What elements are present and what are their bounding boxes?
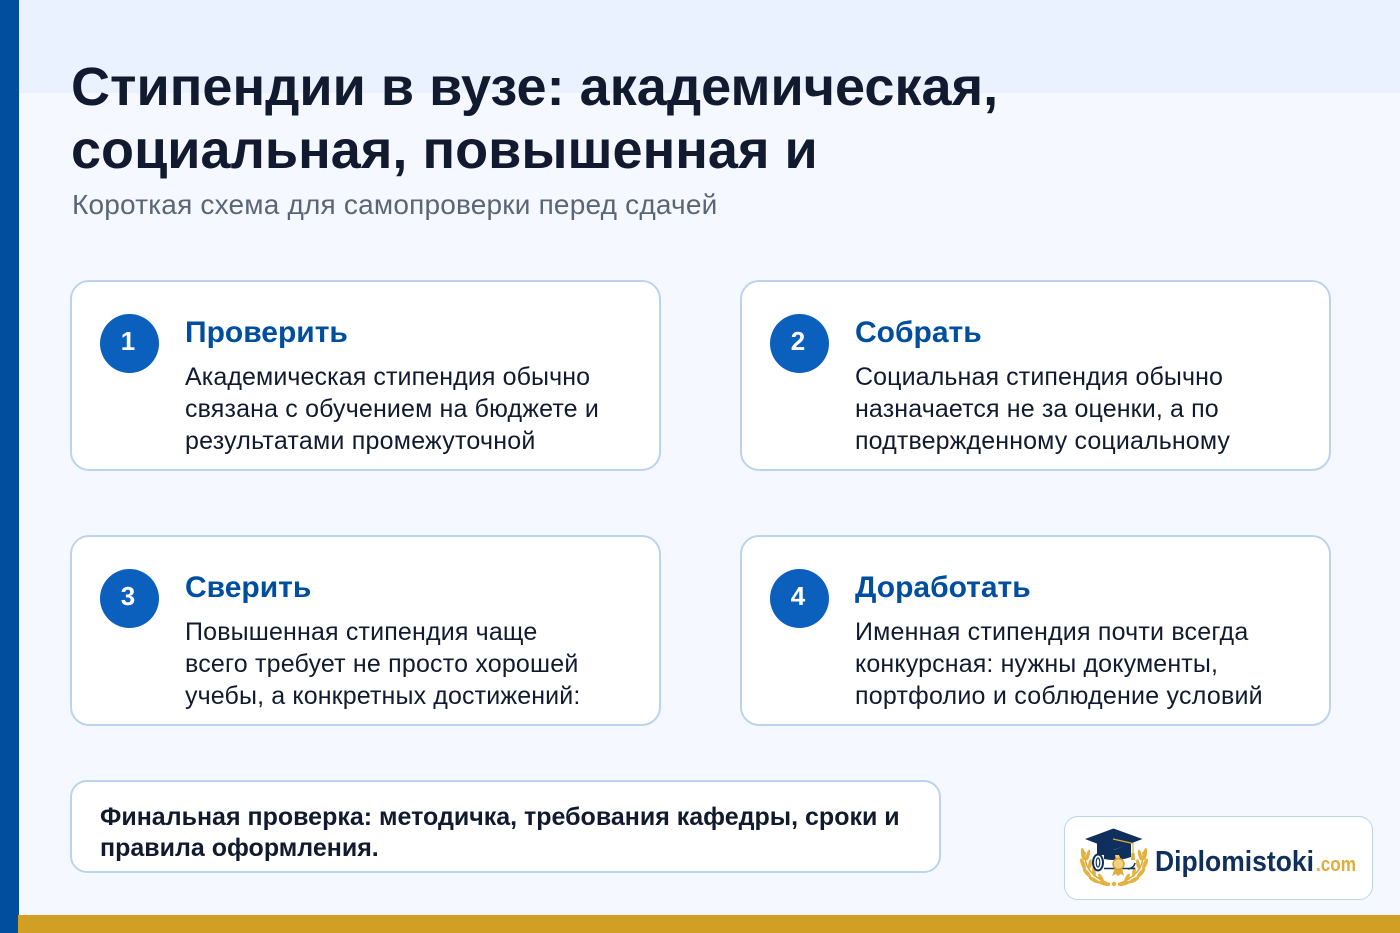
step 3 number badge [100,569,159,628]
icon: graduation cap with laurel [1079,828,1149,887]
logo wordmark: Diplomistoki [1155,846,1314,878]
step 2 text: подтвержденному социальному [855,427,1230,455]
step 2 text [855,363,1230,455]
panel: final check [70,780,941,873]
panel: final check: правила оформления. [100,834,379,862]
step 3 text: Повышенная стипендия чаще [185,618,537,646]
title: социальная, повышенная и [71,120,818,180]
step 1 heading: Проверить [185,316,348,349]
panel: step 2 [740,280,1331,471]
panel: step 4 [740,535,1331,726]
step 4 heading: Доработать [855,571,1031,604]
step 1 text: Академическая стипендия обычно [185,363,590,391]
step 1 text: результатами промежуточной [185,427,536,455]
panel: step 3 [70,535,661,726]
bottom accent bar [18,915,1400,933]
step 2 text: Социальная стипендия обычно [855,363,1223,391]
step 4 number badge: 4 [791,581,805,611]
step 1 text [185,363,599,455]
step 2 heading: Собрать [855,316,982,349]
step 4 text: портфолио и соблюдение условий [855,682,1263,710]
step 3 text: учебы, а конкретных достижений: [185,682,580,710]
step 4 text: Именная стипендия почти всегда [855,618,1248,646]
panel: final check: Финальная проверка: методичка, требования кафедры, сроки и [100,803,900,831]
logo: Diplomistoki.com [1064,816,1373,900]
step 3 text [185,618,580,710]
step 3 text: всего требует не просто хорошей [185,650,579,678]
step 2 number badge [770,314,829,373]
title: Стипендии в вузе: академическая, [71,57,998,117]
step 4 text [855,618,1263,710]
subtitle: Короткая схема для самопроверки перед сдачей [72,189,717,220]
panel: step 1 [70,280,661,471]
logo wordmark: .com [1316,854,1356,876]
step 4 text: конкурсная: нужны документы, [855,650,1218,678]
step 2 text: назначается не за оценки, а по [855,395,1219,423]
step 2 number badge: 2 [791,326,805,356]
step 1 text: связана с обучением на бюджете и [185,395,599,423]
step 1 number badge: 1 [121,326,135,356]
step 3 heading: Сверить [185,571,311,604]
step 4 number badge [770,569,829,628]
step 1 number badge [100,314,159,373]
left accent bar [0,0,19,933]
step 3 number badge: 3 [121,581,135,611]
title [71,57,998,180]
